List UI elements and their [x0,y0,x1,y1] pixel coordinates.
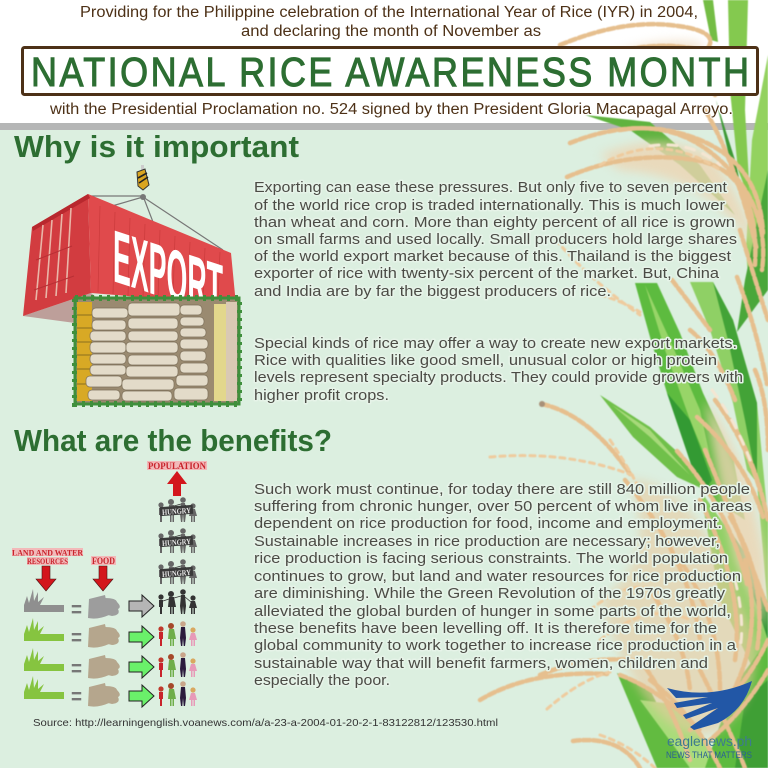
paragraph: such work: especially the poor. [254,672,390,689]
row: healthy 1: = [71,625,82,650]
row: healthy 2 [24,648,197,681]
rice sacks photo [75,298,239,404]
eaglenews logo [666,681,752,760]
intro text: and declaring the month of November as [241,23,541,40]
paragraph: such work: Such work must continue, for today there are still 840 million people [254,481,750,498]
paragraph: such work: continues to grow, but land and water resources for rice production [254,568,741,585]
title box: NATIONAL RICE AWARENESS MONTH [31,50,749,95]
intro text [80,4,698,40]
hungry families [158,497,197,584]
eaglenews logo: eaglenews.ph [667,734,752,749]
paragraph: such work: alleviated the global burden of hunger in some parts of the world, [254,603,731,620]
paragraph: such work: suffering from chronic hunger, over 50 percent of whom live in areas [254,498,752,515]
intro text: Providing for the Philippine celebration of the International Year of Rice (IYR) in 2004, [80,4,698,21]
crane hook and cables [90,165,223,250]
paragraph: such work: rice production is facing serious constraints. The world population [254,550,728,567]
row: healthy 3: = [71,684,82,709]
paragraph: such work: sustainable way that will benefit farmers, women, children and [254,655,708,672]
paragraph: exporting: of the world rice crop is traded internationally. This is much lower [254,197,725,214]
paragraph: such work: Sustainable increases in rice production are necessary; however, [254,533,720,550]
paragraph: exporting: on small farms and used locally. Small producers hold large shares [254,231,737,248]
labels and arrows: FOOD [92,556,115,566]
paragraph: such work: dependent on rice production for food, income and employment. [254,515,722,532]
paragraph: such work: are diminishing. While the Green Revolution of the 1970s greatly [254,585,726,602]
row: healthy 3 [24,676,197,709]
row: healthy 2: = [71,656,82,681]
container [23,194,236,333]
paragraph: exporting: of the world export market because of this. Thailand is the biggest [254,248,732,265]
labels and arrows: RESOURCES [27,556,68,566]
paragraph: special kinds: levels represent specialty products. They could provide growers with [254,369,743,386]
paragraph: special kinds: Rice with qualities like good smell, unusual color or high protein [254,352,717,369]
labels and arrows: LAND AND WATER [12,548,84,558]
row: degraded: = [71,597,82,622]
row: degraded [24,589,197,622]
paragraph: such work: global community to work together to increase rice production in a [254,637,737,654]
icon: eagle wing [667,681,752,730]
paragraph: exporting: and India are by far the biggest producers of rice. [254,283,611,300]
labels and arrows [12,461,207,591]
paragraph: such work: these benefits have been levelling off. It is therefore time for the [254,620,717,637]
food security diagram [12,461,207,709]
paragraph: exporting: Exporting can ease these pressures. But only five to seven percent [254,179,728,196]
paragraph: exporting: than wheat and corn. More than eighty percent of all rice is grown [254,214,735,231]
paragraph: exporting [254,179,737,300]
source: Source: http://learningenglish.voanews.com/a/a-23-a-2004-01-20-2-1-83122812/123530.html [33,717,498,729]
heading: benefits: What are the benefits? [14,423,332,458]
eaglenews logo: NEWS THAT MATTERS [666,750,752,760]
rice plant illustration [480,0,768,768]
labels and arrows: POPULATION [148,462,206,472]
paragraph: special kinds: Special kinds of rice may offer a way to create new export markets. [254,335,737,352]
paragraph: exporting: exporter of rice with twenty-six percent of the market. But, China [254,265,720,282]
text: EXPORT [113,215,223,333]
heading: why is it important: Why is it important [14,129,299,164]
row: healthy 1 [24,618,197,650]
panicles [480,24,768,768]
paragraph: special kinds [254,335,743,404]
leaves [585,0,768,768]
export container image [23,165,239,404]
proclamation line: with the Presidential Proclamation no. 524 signed by then President Gloria Macapagal Arroyo. [49,101,733,118]
paragraph: such work [254,481,752,689]
paragraph: special kinds: higher profit crops. [254,387,389,404]
